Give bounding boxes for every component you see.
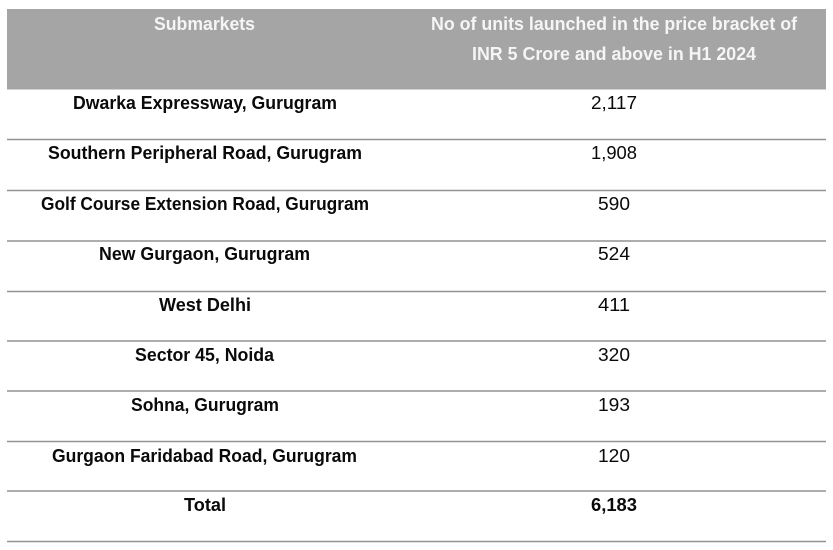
row: Dwarka Expressway: Dwarka Expressway, Gurugram bbox=[73, 93, 337, 113]
row: Sohna: 193 bbox=[598, 394, 630, 415]
row: Total bbox=[184, 495, 637, 515]
row: Gurgaon Faridabad Road bbox=[52, 445, 630, 466]
row: Sector 45, Noida bbox=[135, 344, 630, 365]
row: Golf Course Extension Road: 590 bbox=[598, 193, 630, 214]
row: Southern Peripheral Road: 1,908 bbox=[591, 142, 637, 163]
row: Southern Peripheral Road bbox=[48, 142, 637, 163]
row: Sector 45, Noida: 320 bbox=[598, 344, 630, 365]
row: Total: Total bbox=[184, 495, 226, 515]
row: Sohna bbox=[131, 394, 630, 415]
row: New Gurgaon: New Gurgaon, Gurugram bbox=[99, 244, 310, 264]
row: West Delhi: 411 bbox=[598, 294, 630, 315]
row: Gurgaon Faridabad Road: Gurgaon Faridabad Road, Gurugram bbox=[52, 446, 357, 466]
table header: Submarkets bbox=[154, 14, 255, 34]
row: Golf Course Extension Road bbox=[41, 193, 630, 214]
row: Dwarka Expressway bbox=[73, 92, 637, 113]
table header bbox=[7, 9, 826, 90]
row: Total: 6,183 bbox=[591, 495, 637, 515]
row: West Delhi bbox=[159, 294, 630, 315]
row: Gurgaon Faridabad Road: 120 bbox=[598, 445, 630, 466]
row: Dwarka Expressway: 2,117 bbox=[591, 92, 637, 113]
row: Golf Course Extension Road: Golf Course Extension Road, Gurugram bbox=[41, 194, 369, 214]
table header: No of units launched in the price bracket of bbox=[431, 14, 798, 34]
row: West Delhi: West Delhi bbox=[159, 295, 251, 315]
row: New Gurgaon: 524 bbox=[598, 243, 630, 264]
row: Southern Peripheral Road: Southern Peripheral Road, Gurugram bbox=[48, 143, 362, 163]
row: Sector 45, Noida: Sector 45, Noida bbox=[135, 345, 275, 365]
row: New Gurgaon bbox=[99, 243, 630, 264]
table header: INR 5 Crore and above in H1 2024 bbox=[472, 44, 756, 64]
row: Sohna: Sohna, Gurugram bbox=[131, 395, 279, 415]
